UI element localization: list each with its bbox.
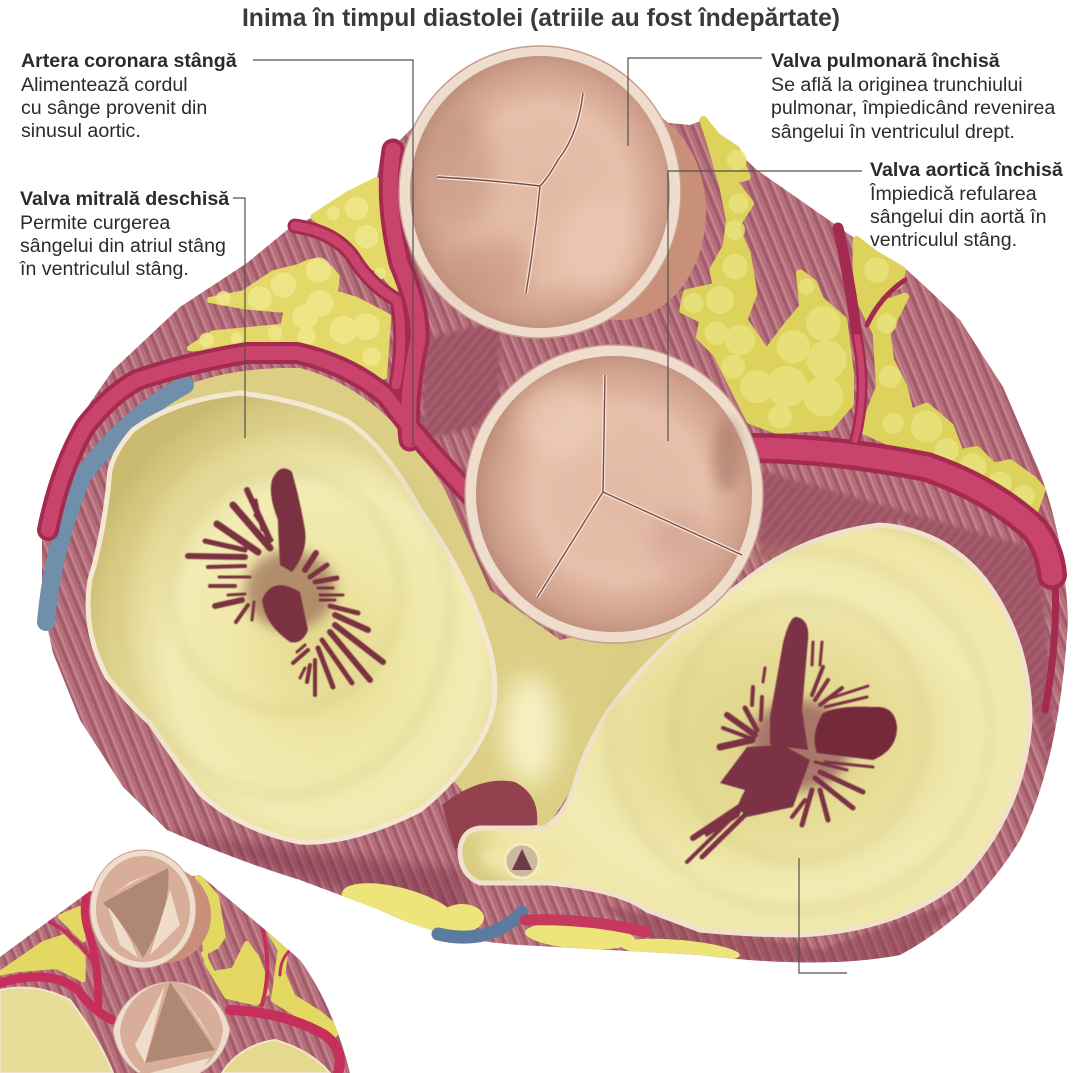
muscle tongue	[442, 781, 537, 850]
aortic ring	[465, 345, 763, 643]
pulmonary commissures	[437, 93, 583, 293]
inset fat	[0, 873, 340, 1037]
fat deposits: bottom	[342, 883, 740, 959]
tricuspid chamber	[460, 525, 1030, 935]
pointer line: tricuspid valve	[799, 858, 847, 973]
title: Inima în timpul diastolei (atriile au fost îndepărtate)	[242, 5, 840, 32]
right coronary artery	[752, 228, 1056, 710]
pointer line: pulmonary valve	[628, 58, 762, 146]
fat deposits: right	[857, 240, 1042, 513]
hook highlight	[480, 840, 580, 876]
mitral chamber	[88, 393, 495, 842]
label: left coronary artery: sinusul aortic.	[21, 120, 141, 142]
pointer line: aortic valve	[668, 171, 862, 441]
aortic valve	[465, 345, 763, 643]
bottom artery	[525, 920, 645, 932]
pulmonary trunk bulge	[534, 104, 706, 320]
pulmonary cusps	[410, 56, 670, 328]
pointer line: coronary artery	[253, 60, 413, 446]
left coronary artery	[48, 150, 470, 530]
label: mitral valve: sângelui din atriul stâng	[20, 235, 226, 257]
aortic cusps	[476, 356, 752, 632]
yellow rim around mitral chamber and septum	[100, 368, 740, 830]
label: aortic valve: sângelui din aortă în	[870, 206, 1046, 228]
chamber rings	[610, 550, 990, 910]
label: pulmonary valve: Valva pulmonară închisă	[771, 50, 1001, 72]
label: aortic valve: ventriculul stâng.	[870, 229, 1017, 251]
label: mitral valve: Valva mitrală deschisă	[20, 188, 230, 210]
label: left coronary artery: cu sânge provenit din	[21, 97, 207, 119]
coronary vein (blue)	[46, 385, 185, 622]
inset right chamber	[222, 1040, 330, 1073]
pulmonary ring	[399, 46, 681, 338]
fat deposit: far right	[1044, 550, 1060, 584]
label: left coronary artery: Alimentează cordul	[21, 74, 188, 96]
inset muscle base	[0, 875, 350, 1073]
label: aortic valve: Valva aortică închisă	[870, 159, 1064, 181]
fat deposits: upper left	[190, 180, 397, 377]
label: pulmonary valve: pulmonar, împiedicând revenirea	[771, 97, 1055, 119]
label: mitral valve: în ventriculul stâng.	[19, 258, 189, 280]
label: mitral valve: Permite curgerea	[20, 212, 170, 234]
pulmonary valve	[399, 46, 706, 338]
dark muscle shading	[150, 320, 1060, 965]
fat deposits: upper right	[683, 120, 850, 430]
label: pulmonary valve: Se află la originea trunchiului	[771, 74, 1023, 96]
heart muscle base	[42, 100, 1068, 962]
inset left chamber	[0, 988, 113, 1073]
small inset heart	[0, 850, 350, 1073]
label: pulmonary valve: sângelui în ventriculul drept.	[771, 121, 1015, 143]
bottom vein (blue)	[438, 912, 522, 937]
coronary sinus opening	[505, 844, 539, 878]
pointer line: mitral valve	[233, 198, 245, 438]
inset aortic valve	[113, 982, 230, 1073]
septum highlight	[502, 675, 558, 785]
mitral valve leaflets	[188, 468, 383, 695]
aortic commissures	[537, 375, 742, 598]
inset pulmonary valve	[90, 850, 211, 968]
inset arteries	[0, 893, 340, 1073]
chamber rings	[120, 425, 450, 795]
tricuspid valve leaflets	[687, 617, 897, 862]
label: aortic valve: Împiedică refularea	[869, 182, 1037, 205]
label: left coronary artery: Artera coronara stângă	[21, 50, 238, 72]
